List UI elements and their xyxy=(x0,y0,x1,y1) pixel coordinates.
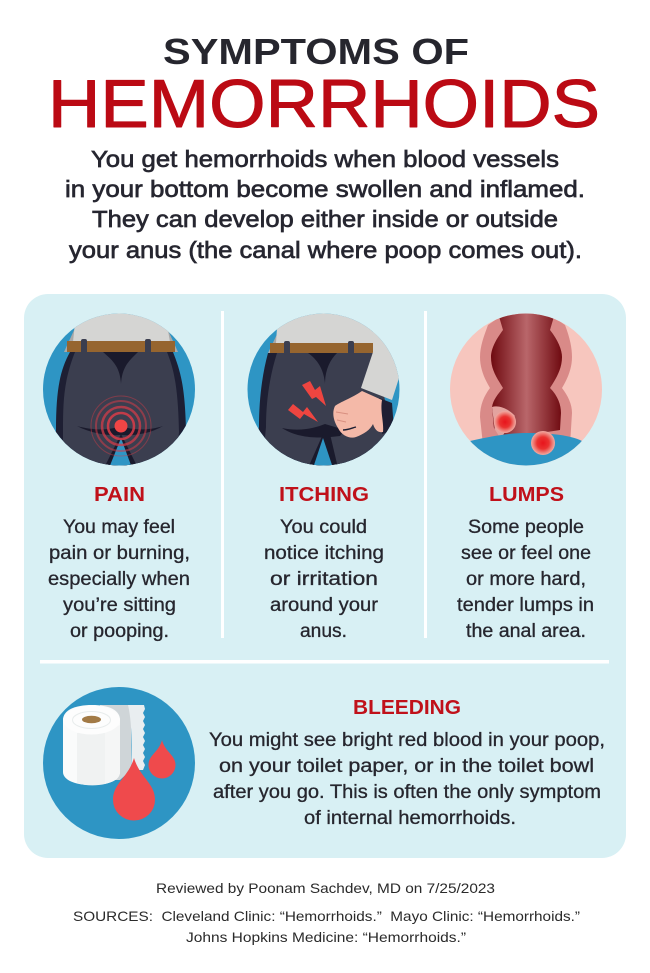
text: lumps: tender lumps in xyxy=(457,595,594,616)
text: pain: especially when xyxy=(48,569,190,590)
text: pain xyxy=(48,517,190,642)
footer: review and sources xyxy=(73,880,580,945)
text: bleeding: of internal hemorrhoids. xyxy=(304,808,516,829)
footer: review and sources: SOURCES: Cleveland Clinic: “Hemorrhoids.” Mayo Clinic: “Hemorrhoids.” xyxy=(73,908,580,924)
intro text: They can develop either inside or outside xyxy=(92,206,558,232)
text: itching: notice itching xyxy=(264,543,384,564)
text: lumps: Some people xyxy=(468,517,584,538)
intro text: your anus (the canal where poop comes out). xyxy=(69,237,582,263)
text: itching: around your xyxy=(270,595,379,616)
text: lumps: the anal area. xyxy=(466,621,586,642)
text: bleeding: on your toilet paper, or in the toilet bowl xyxy=(219,756,594,777)
text: pain: pain or burning, xyxy=(49,543,190,564)
footer: review and sources: Johns Hopkins Medicine: “Hemorrhoids.” xyxy=(186,929,466,945)
text: pain: or pooping. xyxy=(70,621,169,642)
text: itching: anus. xyxy=(300,621,347,642)
title: hemorrhoids: HEMORRHOIDS xyxy=(48,66,600,142)
icon: pain xyxy=(43,313,195,470)
panel: symptoms xyxy=(24,294,626,858)
icon: lumps xyxy=(449,313,603,470)
title: symptoms of: SYMPTOMS OF xyxy=(163,31,469,72)
text: itching: or irritation xyxy=(270,569,378,590)
text: pain: you’re sitting xyxy=(63,595,176,616)
text: lumps xyxy=(457,517,594,642)
heading: lumps: LUMPS xyxy=(489,484,564,506)
icon: itching xyxy=(247,313,402,470)
icon: toilet paper and blood drops xyxy=(43,687,195,839)
intro text xyxy=(65,146,585,263)
heading: pain: PAIN xyxy=(94,484,145,506)
heading: bleeding: BLEEDING xyxy=(353,697,461,719)
text: pain: You may feel xyxy=(63,517,175,538)
text: bleeding: You might see bright red blood in your poop, xyxy=(209,730,605,751)
text: lumps: see or feel one xyxy=(461,543,591,564)
text: itching: You could xyxy=(280,517,367,538)
text: lumps: or more hard, xyxy=(466,569,586,590)
footer: review and sources: Reviewed by Poonam Sachdev, MD on 7/25/2023 xyxy=(156,880,495,896)
text: bleeding: after you go. This is often the only symptom xyxy=(213,782,601,803)
heading: itching: ITCHING xyxy=(279,484,369,506)
intro text: in your bottom become swollen and inflamed. xyxy=(65,176,585,202)
text: itching xyxy=(264,517,384,642)
text: bleeding xyxy=(209,730,605,829)
intro text: You get hemorrhoids when blood vessels xyxy=(91,146,559,172)
